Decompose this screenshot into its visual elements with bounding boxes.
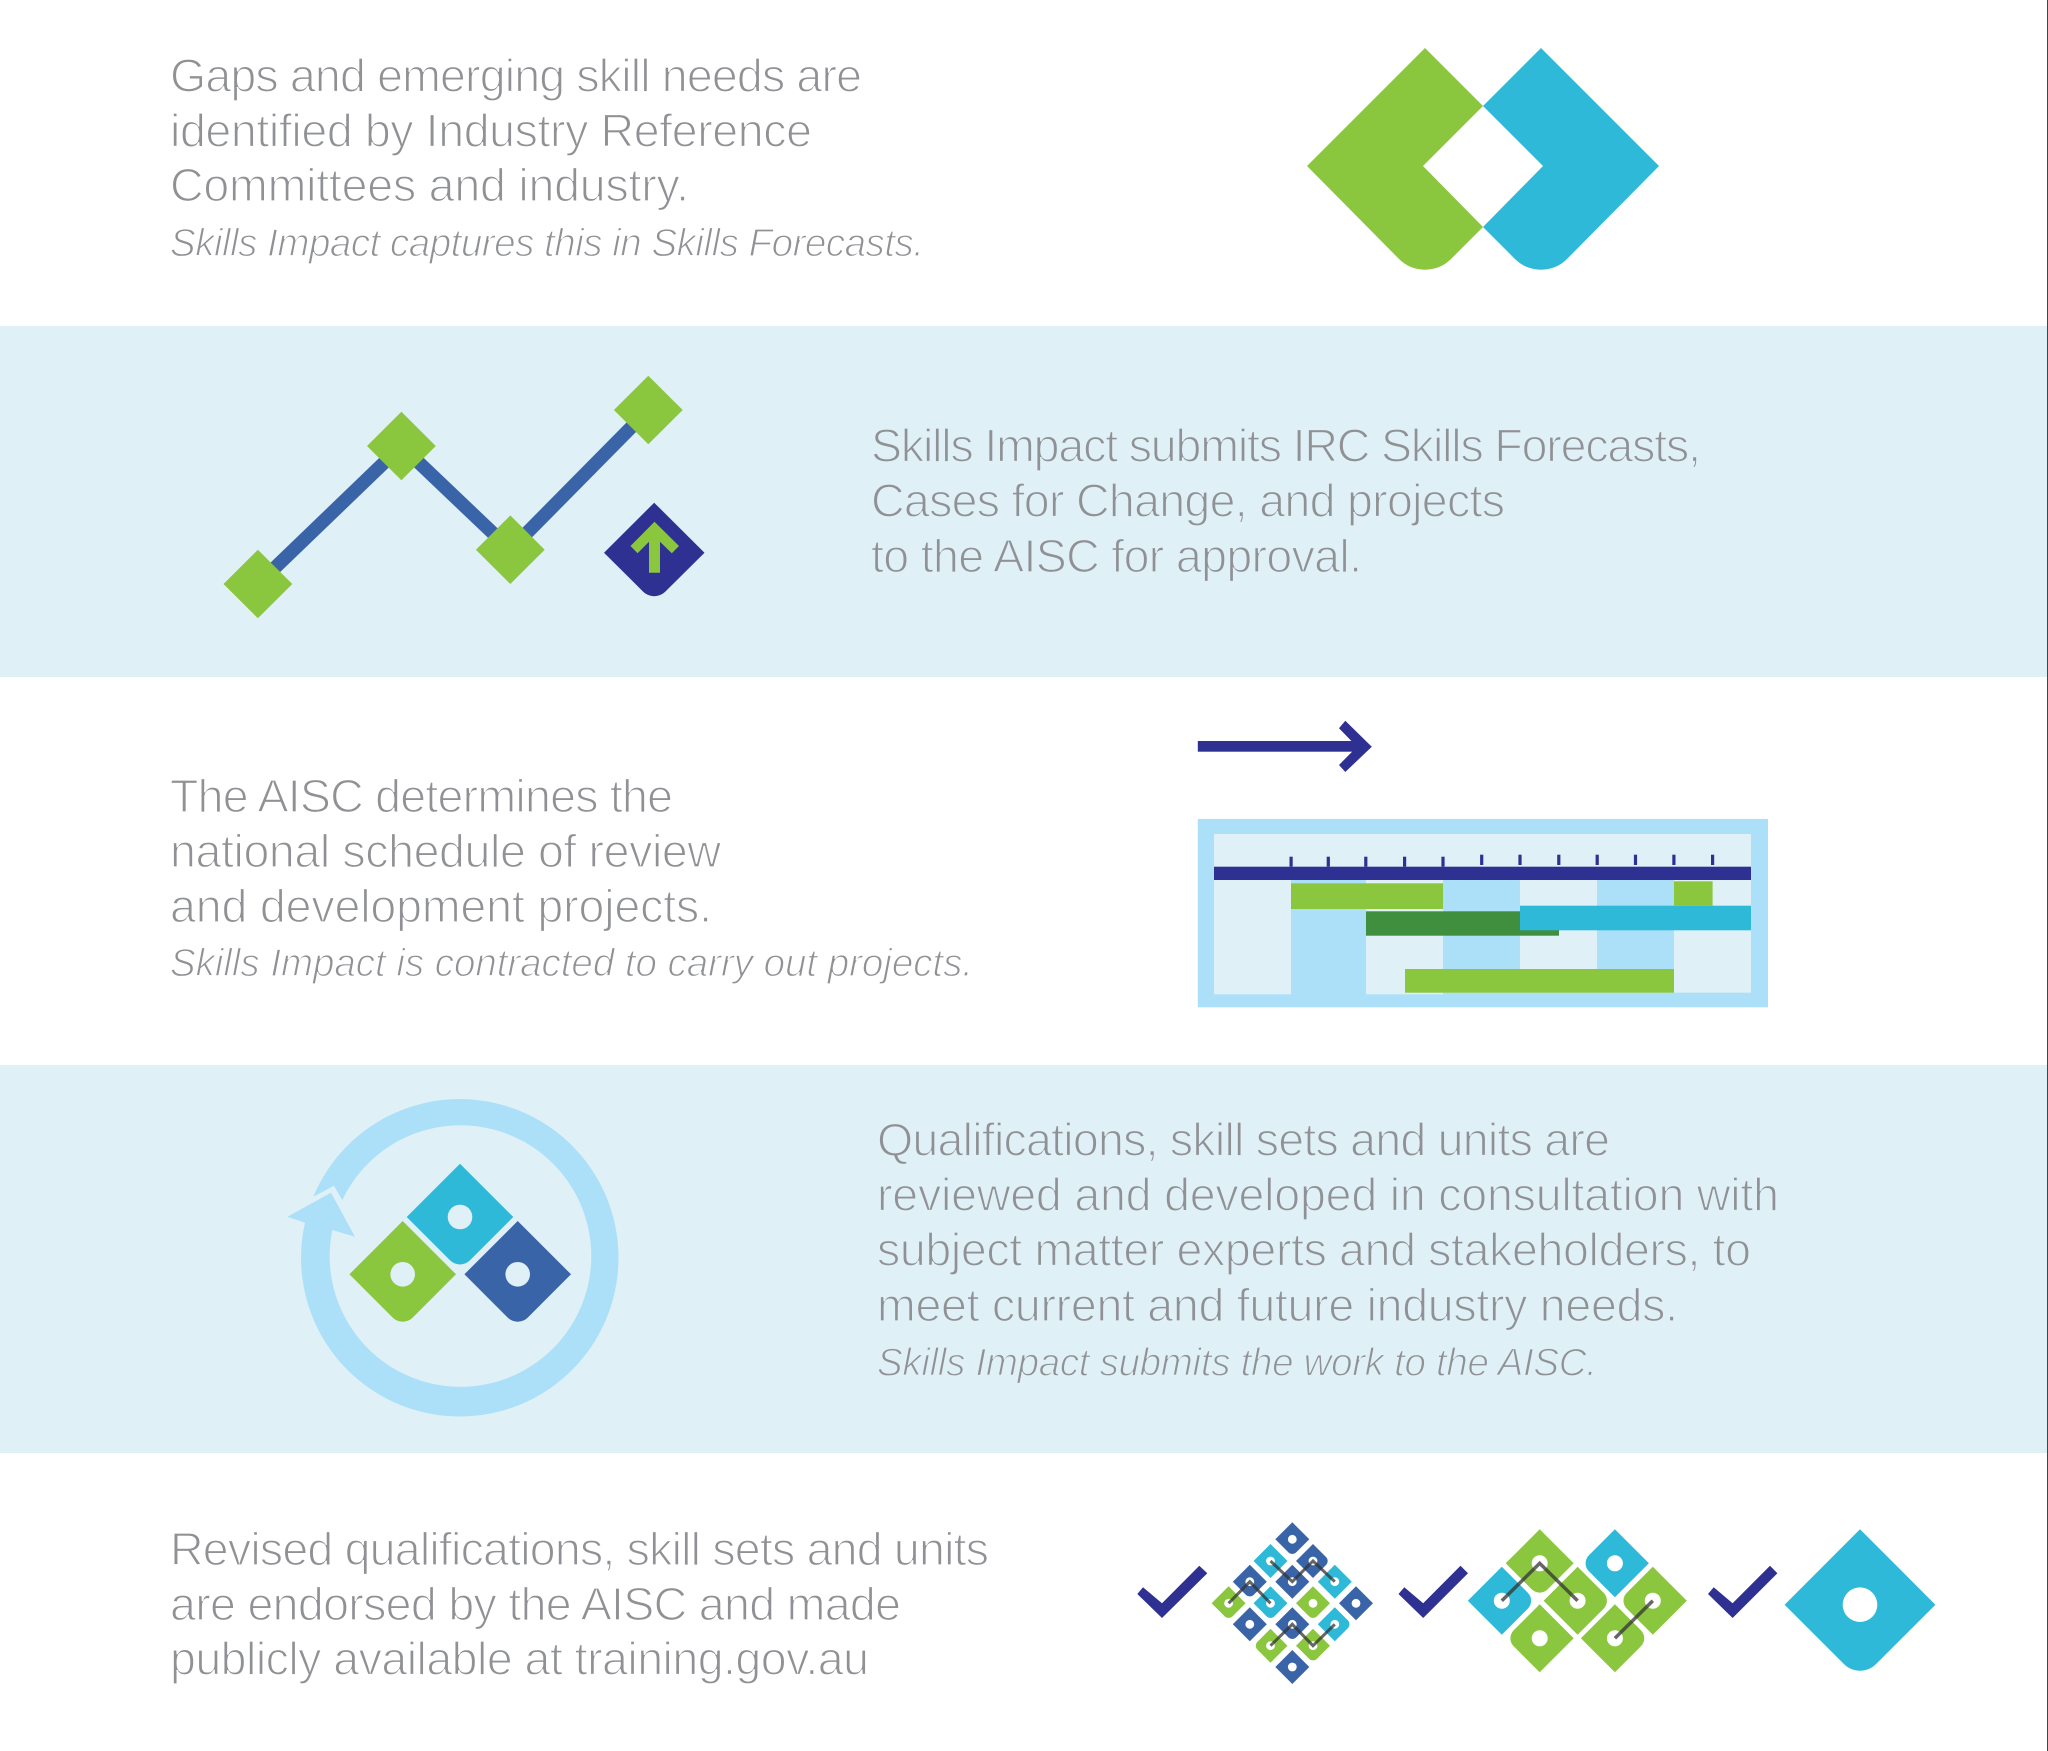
icon: circular arrow with three diamonds <box>287 1099 618 1416</box>
text: step 1 description: identified by Industry Reference <box>170 104 812 156</box>
text: step 4 description: Qualifications, skill sets and units are <box>877 1114 1610 1166</box>
text: step 3 description: The AISC determines the <box>170 770 673 822</box>
text: step 2 description: Skills Impact submits IRC Skills Forecasts, <box>871 420 1701 472</box>
panel: step 4 review and development <box>0 1065 2048 1453</box>
icon: line chart with diamond markers <box>224 376 683 618</box>
text: step 5 description <box>170 1523 989 1684</box>
text: step 4 description <box>877 1114 1779 1384</box>
timeline axis with ticks <box>1214 855 1751 880</box>
panel: step 1 skill needs <box>0 0 2048 326</box>
text: step 5 description: Revised qualifications, skill sets and units <box>170 1523 989 1575</box>
text: step 1 description: Gaps and emerging skill needs are <box>170 50 862 102</box>
icon: interlocking green and blue diamonds <box>1307 48 1659 270</box>
text: step 5 description: publicly available at training.gov.au <box>170 1632 869 1684</box>
text: step 3 description: national schedule of review <box>170 825 721 877</box>
icon: third check mark <box>1708 1566 1777 1618</box>
text: step 4 description: meet current and future industry needs. <box>877 1279 1678 1331</box>
text: step 3 description: and development projects. <box>170 880 712 932</box>
text: step 1 description: Committees and industry. <box>170 159 689 211</box>
icon: small diamond cluster <box>1212 1522 1373 1684</box>
panel: step 5 endorsement <box>0 1453 2048 1751</box>
icon: second check mark <box>1398 1566 1468 1618</box>
panel: step 2 submission to AISC <box>0 326 2048 677</box>
text: step 2 description <box>871 420 1701 582</box>
text: step 2 description: to the AISC for approval. <box>871 530 1362 582</box>
text: step 3 description <box>170 770 973 985</box>
text: step 5 description: are endorsed by the AISC and made <box>170 1578 901 1630</box>
icon: large cyan diamond <box>1785 1529 1935 1671</box>
icon: navy arrow <box>1198 721 1372 772</box>
chart: gantt schedule <box>1198 819 1768 1007</box>
panel: step 3 national schedule <box>0 677 2048 1065</box>
text: step 4 description: subject matter experts and stakeholders, to <box>877 1224 1751 1276</box>
schedule bars <box>1291 881 1751 993</box>
icon: medium diamond cluster <box>1468 1529 1687 1672</box>
text: step 3 description: Skills Impact is contracted to carry out projects. <box>170 942 973 985</box>
text: step 4 description: Skills Impact submits the work to the AISC. <box>877 1342 1597 1384</box>
text: step 1 description: Skills Impact captures this in Skills Forecasts. <box>170 222 924 265</box>
text: step 1 description <box>170 50 924 265</box>
text: step 4 description: reviewed and developed in consultation with <box>877 1168 1779 1220</box>
icon: upward arrow diamond <box>604 503 704 596</box>
icon: first check mark <box>1137 1566 1207 1618</box>
text: step 2 description: Cases for Change, and projects <box>871 474 1505 526</box>
